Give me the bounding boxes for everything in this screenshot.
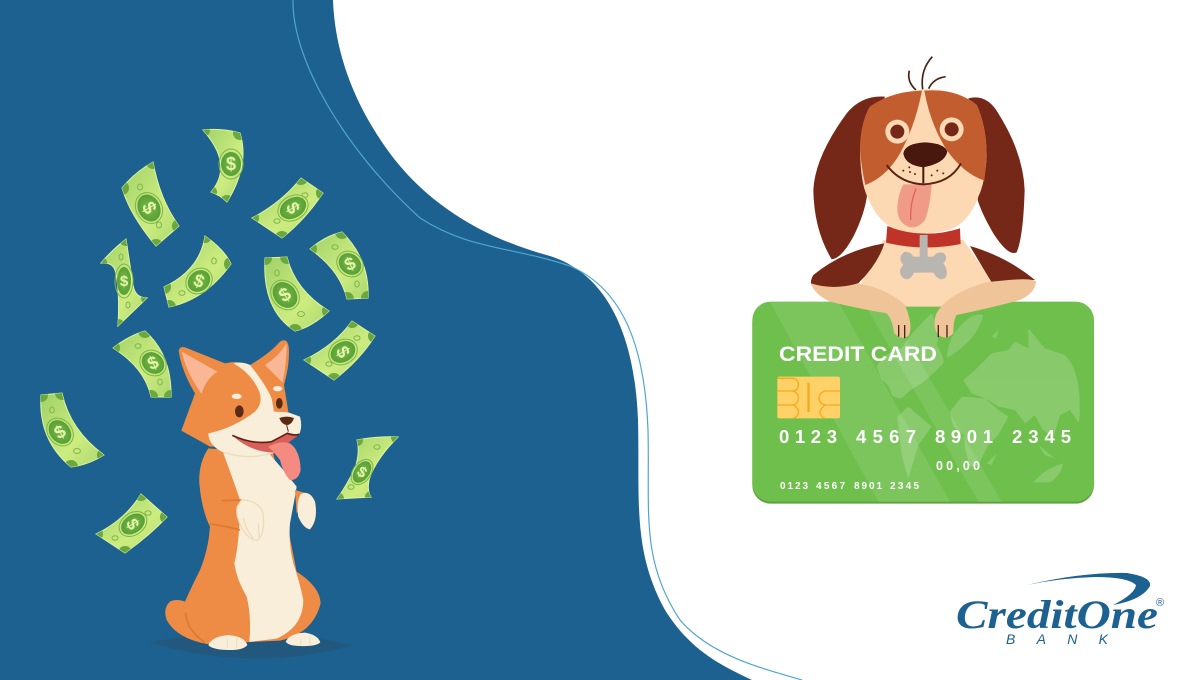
left leg bbox=[811, 283, 911, 338]
collar bbox=[886, 226, 961, 248]
beagle dog bbox=[811, 57, 1036, 338]
ground shadow bbox=[150, 633, 353, 658]
head patch left bbox=[860, 91, 922, 185]
right leg bbox=[935, 279, 1036, 337]
right ear bbox=[968, 97, 1025, 253]
bill 4 bbox=[309, 232, 369, 300]
bill 10 bbox=[40, 392, 105, 468]
bill 12: $ bbox=[353, 463, 371, 482]
bill 1: $ bbox=[226, 154, 236, 174]
logo swoosh bbox=[1027, 573, 1150, 605]
mouth bbox=[887, 163, 961, 184]
bill 3: $ bbox=[282, 199, 304, 217]
bill 6: $ bbox=[275, 283, 295, 307]
bill 7 bbox=[100, 238, 148, 328]
small card number bbox=[780, 481, 919, 492]
bill 5 bbox=[163, 235, 232, 308]
foot left bbox=[208, 635, 247, 650]
background: blue wave panel bbox=[0, 0, 752, 680]
card number: 4567 bbox=[856, 426, 916, 447]
paw toe lines bbox=[243, 518, 259, 538]
foot toe lines bbox=[227, 637, 310, 648]
foot right bbox=[286, 633, 320, 646]
bill 10: $ bbox=[51, 421, 69, 443]
bill 2 bbox=[122, 161, 180, 247]
credit card bbox=[752, 302, 1094, 504]
bill 11 bbox=[95, 493, 168, 554]
small card number: 4567 bbox=[816, 481, 845, 492]
bill 9 bbox=[112, 330, 172, 398]
small card number: 2345 bbox=[890, 481, 919, 492]
beagle chest bbox=[861, 240, 993, 307]
bill 1 bbox=[202, 128, 244, 203]
head patch right bbox=[924, 90, 987, 181]
EMV chip bbox=[777, 377, 840, 418]
card shadow edge bbox=[752, 304, 1094, 504]
card shine and map bbox=[770, 302, 1080, 502]
bill 4: $ bbox=[341, 253, 359, 275]
bill 3 bbox=[251, 177, 324, 239]
nose bbox=[903, 142, 947, 167]
thin wave line bbox=[293, 0, 802, 680]
back patch left bbox=[811, 243, 884, 289]
left ear bbox=[813, 97, 885, 259]
tag strap and bone bbox=[900, 235, 947, 279]
haunch line bbox=[186, 613, 205, 643]
nose bbox=[279, 417, 294, 425]
logo wordmark: CreditOne bbox=[956, 592, 1158, 637]
card number bbox=[779, 426, 1071, 447]
eyes bbox=[885, 120, 909, 144]
ear inner right bbox=[265, 343, 287, 383]
corgi body bbox=[165, 448, 321, 644]
bill 6 bbox=[264, 256, 330, 332]
bill 2: $ bbox=[137, 198, 161, 218]
tongue bbox=[897, 184, 932, 227]
body fold lines bbox=[210, 500, 242, 530]
small card number: 0123 bbox=[780, 481, 808, 492]
whisker dots bbox=[902, 166, 944, 176]
cream belly bbox=[223, 453, 303, 642]
chin line bbox=[225, 453, 273, 457]
falling money bbox=[34, 123, 405, 560]
eyes bbox=[235, 405, 244, 417]
card number: 8901 bbox=[935, 426, 993, 447]
card date: 00,00 bbox=[936, 459, 980, 473]
bill 8 bbox=[303, 320, 376, 381]
bill 12 bbox=[336, 436, 399, 500]
ear inner left bbox=[182, 352, 217, 394]
back patch right bbox=[970, 246, 1035, 282]
bill 7: $ bbox=[120, 273, 129, 290]
bill 5: $ bbox=[191, 270, 207, 292]
card body bbox=[752, 302, 1094, 502]
head bbox=[860, 89, 987, 233]
logo subtitle: BANK bbox=[1006, 631, 1109, 647]
front paw left bbox=[237, 500, 264, 541]
card number: 2345 bbox=[1012, 426, 1071, 447]
bill 11: $ bbox=[122, 515, 143, 534]
blaze and muzzle bbox=[208, 363, 301, 456]
bill 9: $ bbox=[144, 352, 162, 374]
card title: CREDIT CARD bbox=[779, 343, 937, 366]
hair tufts bbox=[909, 57, 946, 90]
toes bbox=[899, 325, 947, 338]
small card number: 8901 bbox=[854, 481, 882, 492]
card number: 0123 bbox=[779, 426, 837, 447]
mouth bbox=[232, 433, 299, 453]
brows bbox=[232, 394, 242, 399]
registered mark: ® bbox=[1156, 597, 1164, 609]
tongue bbox=[268, 442, 301, 480]
bill 8: $ bbox=[332, 343, 354, 361]
corgi dog bbox=[150, 340, 353, 658]
corgi head bbox=[179, 340, 289, 447]
front paw right bbox=[295, 490, 316, 529]
Credit One Bank logo bbox=[956, 573, 1164, 647]
